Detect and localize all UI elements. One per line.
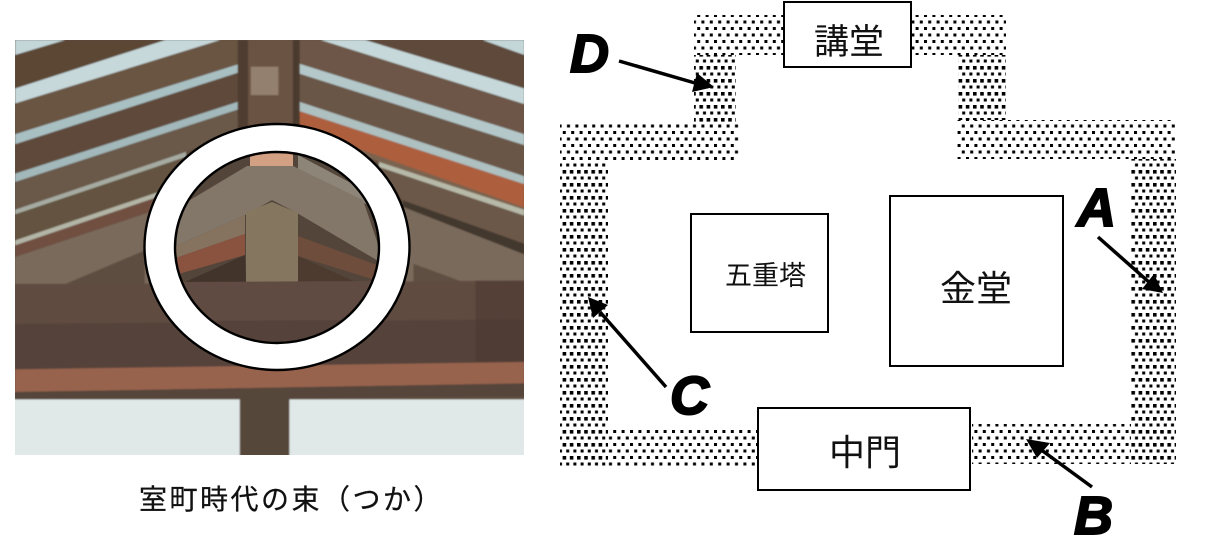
strut inside circle: [176, 153, 378, 321]
label A with arrow: [1075, 178, 1163, 293]
building: middle gate: [758, 408, 970, 490]
label D with arrow: D: [570, 24, 609, 84]
building: lecture hall: [784, 2, 911, 67]
building: golden hall: 金堂: [940, 268, 1012, 309]
building: middle gate: 中門: [829, 432, 901, 473]
gable boards: [15, 206, 524, 284]
building: five-storey pagoda: 五重塔: [725, 261, 806, 291]
caption: 室町時代の束（つか）: [139, 484, 444, 515]
building: five-storey pagoda: [691, 214, 828, 332]
right rafters: [482, 40, 524, 55]
circle marker: white ring: [144, 124, 410, 370]
beams: [404, 280, 524, 284]
building: lecture hall: 講堂: [814, 23, 884, 62]
label C with arrow: [588, 297, 710, 426]
label A with arrow: A: [1075, 178, 1116, 238]
upper post: [238, 40, 250, 130]
label D with arrow: [570, 24, 714, 92]
left rafters: [15, 40, 65, 55]
label B with arrow: [1026, 439, 1113, 541]
photo: wooden roof truss with circled strut: [10, 37, 531, 463]
building: golden hall: [890, 196, 1063, 366]
corridor hatching: [560, 15, 1176, 467]
site plan: temple corridor: [560, 2, 1176, 490]
label C with arrow: C: [670, 366, 710, 426]
